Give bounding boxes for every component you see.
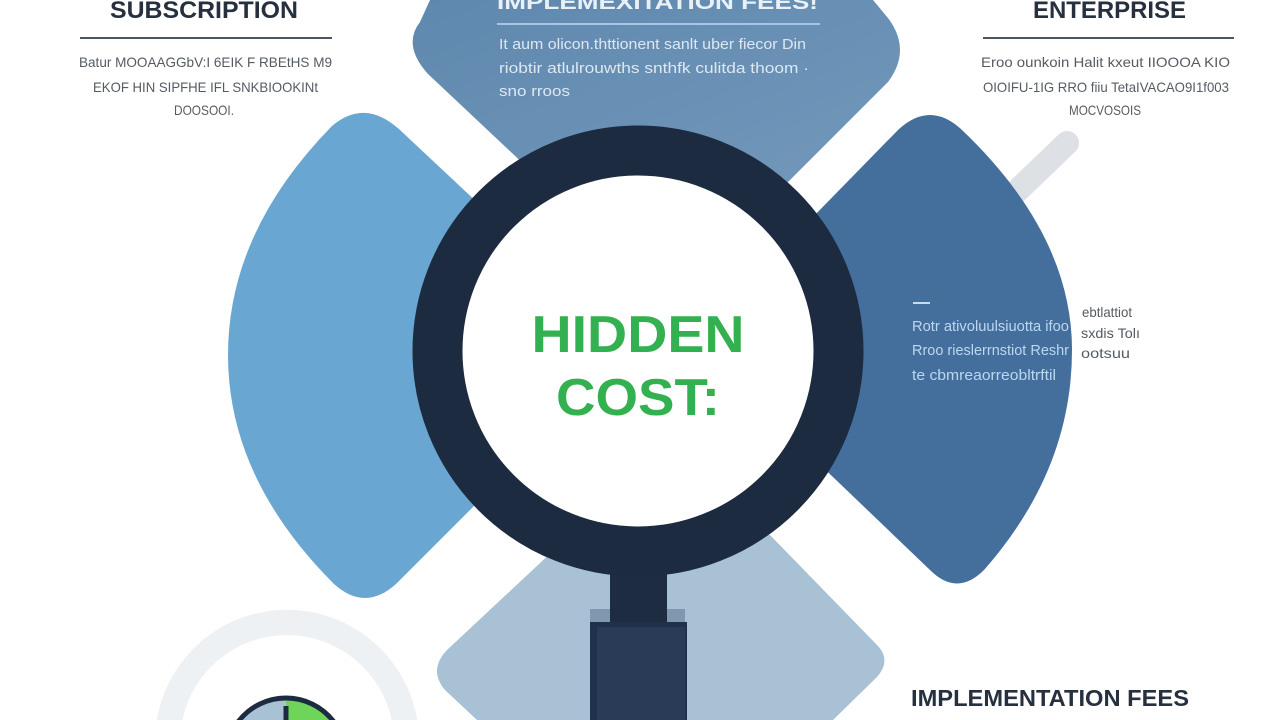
text block: enterprise description: MOCVOSOIS	[1069, 102, 1141, 118]
icon: gauge	[157, 610, 417, 720]
text block: right petal description: Rroo rieslerrnstiot Reshr	[912, 342, 1069, 359]
text block: subscription description	[79, 38, 332, 118]
text block: subscription description: Batur MOOAAGGbV:I 6EIK F RBEtHS M9	[79, 54, 332, 70]
title: hidden cost	[532, 306, 744, 427]
text block: implementation description: riobtir atlulrouwths snthfk culitda thoom ·	[499, 60, 809, 77]
text block: enterprise description	[981, 38, 1234, 118]
text block: right side note: ootsuu	[1081, 345, 1130, 361]
panel: implementation fees petal	[413, 0, 900, 190]
icon: handle collar	[590, 609, 685, 623]
panel: enterprise	[981, 0, 1234, 118]
icon: magnifying glass	[438, 150, 838, 720]
heading: implementation fees label: IMPLEMENTATION FEES	[911, 685, 1189, 711]
text block: right side note	[1081, 304, 1140, 361]
panel: left petal	[228, 113, 480, 598]
icon: handle grip	[590, 622, 687, 720]
text block: right petal description: Rotr ativoluulsiuotta ifoo	[912, 318, 1069, 335]
icon: gauge dial	[236, 696, 336, 720]
text block: subscription description: EKOF HIN SIPFHE IFL SNKBIOOKINt	[93, 79, 318, 95]
text block: right side note: ebtlattiot	[1082, 304, 1132, 320]
text block: right petal description	[912, 303, 1069, 384]
title: hidden cost: COST:	[556, 369, 720, 427]
icon: pointer stick	[1016, 143, 1067, 192]
panel: subscription	[79, 0, 332, 118]
text block: enterprise description: Eroo ounkoin Halit kxeut IIOOOA KIO	[981, 54, 1230, 70]
text block: implementation description: sno rroos	[499, 83, 570, 100]
title: hidden cost: HIDDEN	[532, 306, 744, 364]
text block: subscription description: DOOSOOI.	[174, 102, 234, 118]
text block: implementation description: It aum olicon.thttionent sanlt uber fiecor Din	[499, 36, 806, 53]
panel: right petal	[810, 115, 1072, 584]
text block: enterprise description: OIOIFU-1IG RRO fiiu TetaIVACAO9I1f003	[983, 79, 1229, 95]
panel: bottom petal	[437, 535, 884, 720]
icon: gauge outer ring	[157, 610, 417, 720]
text block: right petal description: te cbmreaorreobltrftil	[912, 367, 1056, 384]
text block: right side note: sxdis Tolı	[1081, 325, 1140, 341]
icon: lens ring	[438, 150, 838, 552]
text block: implementation description	[497, 24, 820, 100]
icon: handle neck	[610, 560, 667, 626]
